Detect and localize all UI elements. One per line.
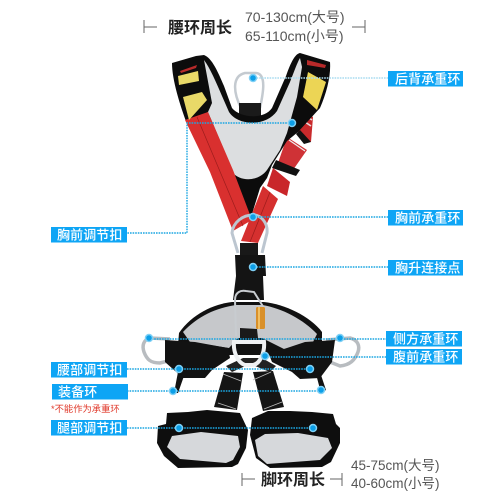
ventral D-ring bbox=[234, 342, 264, 365]
label: chest load ring: 胸前承重环 bbox=[395, 210, 461, 226]
leg pad mesh bbox=[167, 432, 332, 464]
label: side load ring: 侧方承重环 bbox=[393, 332, 459, 346]
right leg pad bbox=[250, 411, 340, 468]
callout lines and markers bbox=[127, 74, 388, 432]
heading: waist size: 腰环周长 bbox=[168, 19, 232, 37]
label: leg adjustment buckle: 腿部调节扣 bbox=[57, 420, 123, 436]
waist belt straps bbox=[165, 340, 230, 378]
label: waist adjustment buckle: 腰部调节扣 bbox=[57, 362, 123, 378]
heading: waist size: 70-130cm(大号) bbox=[245, 9, 345, 25]
label: gear loop bbox=[52, 384, 128, 400]
chest buckle bbox=[240, 243, 258, 255]
chest D-ring bbox=[232, 215, 267, 253]
back D-ring bbox=[235, 73, 263, 117]
shoulder pad black frame bbox=[172, 53, 330, 214]
label: gear loop: 装备环 bbox=[58, 384, 97, 400]
note: not load bearing: *不能作为承重环 bbox=[51, 403, 120, 414]
leg straps bbox=[214, 371, 284, 411]
illustration: safety harness bbox=[143, 53, 359, 468]
yellow shoulder patches bbox=[178, 60, 326, 120]
label: ventral load ring: 腹前承重环 bbox=[393, 350, 459, 364]
centre connector strap bbox=[233, 255, 266, 300]
label: back load ring: 后背承重环 bbox=[395, 72, 461, 86]
heading: leg loop size: 40-60cm(小号) bbox=[351, 476, 440, 491]
heading: waist size: 65-110cm(小号) bbox=[245, 28, 344, 44]
carabiner bbox=[235, 291, 265, 338]
waist belt mesh pad bbox=[178, 302, 322, 355]
heading: leg loop size: 脚环周长 bbox=[261, 471, 325, 489]
left red strap bbox=[185, 112, 252, 231]
right red strap and adjusters bbox=[241, 107, 313, 243]
side rings bbox=[143, 338, 359, 366]
label: chest ascender point: 胸升连接点 bbox=[395, 260, 461, 276]
label: chest adjustment buckle: 胸前调节扣 bbox=[57, 228, 123, 242]
mesh back pad bbox=[204, 58, 302, 179]
heading: leg loop size: 45-75cm(大号) bbox=[351, 458, 440, 473]
left leg pad bbox=[157, 410, 248, 468]
equipment loops bbox=[174, 372, 326, 393]
heading: leg loop size bbox=[242, 458, 440, 491]
heading: waist size bbox=[144, 9, 365, 44]
